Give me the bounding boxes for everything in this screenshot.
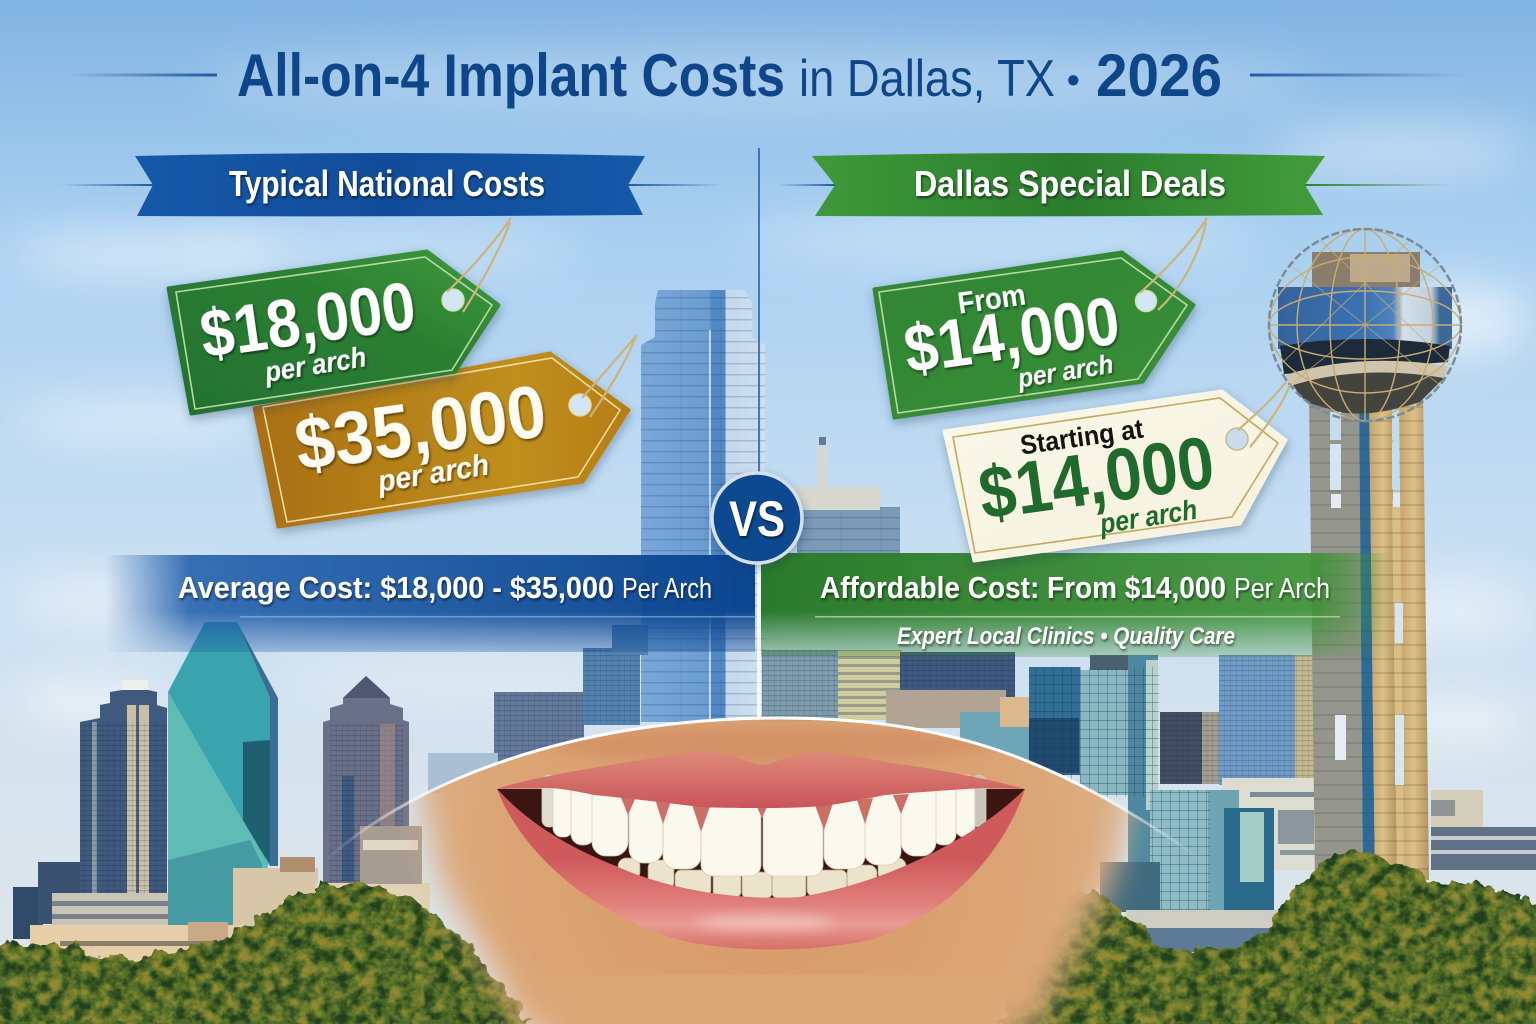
upper teeth — [542, 775, 986, 876]
tree base colour — [0, 863, 1536, 1024]
observation sphere — [1269, 229, 1461, 421]
smile photo — [323, 700, 1202, 1024]
price tag: green $18,000 — [168, 218, 511, 414]
VS badge: VS — [729, 491, 785, 547]
cost bar: affordable: Affordable Cost: From $14,000 — [820, 570, 1226, 605]
building: stepped tower — [80, 680, 167, 897]
title — [67, 42, 1465, 109]
price tag: green From $14,000: From — [955, 277, 1028, 321]
upper lip — [497, 752, 1025, 808]
mouth interior — [497, 789, 1025, 898]
title: 2026 — [1096, 42, 1222, 109]
foliage — [0, 850, 1536, 1024]
price tag: green From $14,000: per arch — [1015, 349, 1115, 394]
skyline: centre glass tower — [583, 290, 902, 725]
ribbon: Dallas Special Deals — [778, 153, 1450, 216]
building: far tower stub — [494, 692, 584, 762]
dome outline — [323, 718, 1202, 863]
price tag: green $18,000: $18,000 — [196, 268, 420, 373]
building: pale background block — [428, 753, 498, 793]
ribbon: Typical National Costs: Typical National Costs — [229, 163, 545, 204]
price tag: gold $35,000: per arch — [374, 447, 491, 499]
lip highlight — [695, 915, 835, 929]
skyline: left buildings — [13, 622, 584, 963]
price tag: green From $14,000: $14,000 — [900, 283, 1124, 388]
price tag: green $18,000: per arch — [262, 341, 368, 389]
cost bar: affordable — [761, 553, 1392, 657]
ribbon: Typical National Costs — [60, 153, 723, 216]
title: All-on-4 Implant Costs — [237, 42, 785, 109]
skyline: right buildings — [886, 652, 1536, 952]
price tag: cream Starting at $14,000: per arch — [1097, 494, 1199, 540]
price tag: gold $35,000: $35,000 — [290, 369, 551, 486]
price tag: gold $35,000 — [254, 335, 637, 527]
trees — [0, 850, 1536, 1024]
cost bar: average — [105, 555, 755, 652]
lower lip — [497, 789, 1025, 949]
building: Fountain Place — [168, 622, 278, 928]
cost bar: average: Per Arch — [622, 573, 712, 605]
ribbon: Dallas Special Deals: Dallas Special Deals — [914, 163, 1226, 204]
price tag: cream Starting at $14,000: $14,000 — [974, 420, 1219, 535]
VS badge — [712, 473, 802, 563]
Reunion Tower — [1269, 229, 1461, 880]
price tag: green From $14,000 — [874, 218, 1207, 418]
price tag: cream Starting at $14,000 — [944, 382, 1290, 561]
price tag: cream Starting at $14,000: Starting at — [1018, 414, 1145, 461]
cost bar: affordable: Expert Local Clinics • Quality Care — [897, 623, 1235, 650]
building: pyramid tower — [323, 676, 409, 883]
title: • — [1067, 59, 1080, 100]
tower shafts — [1309, 385, 1429, 880]
low buildings — [13, 826, 430, 963]
title: in Dallas, TX — [799, 50, 1055, 108]
gums — [620, 794, 909, 832]
lower teeth — [618, 858, 906, 898]
divider line — [757, 148, 761, 720]
cost bar: average: Average Cost: $18,000 - $35,000 — [178, 570, 614, 605]
cost bar: affordable: Per Arch — [1234, 573, 1330, 605]
skin — [415, 700, 1135, 1024]
